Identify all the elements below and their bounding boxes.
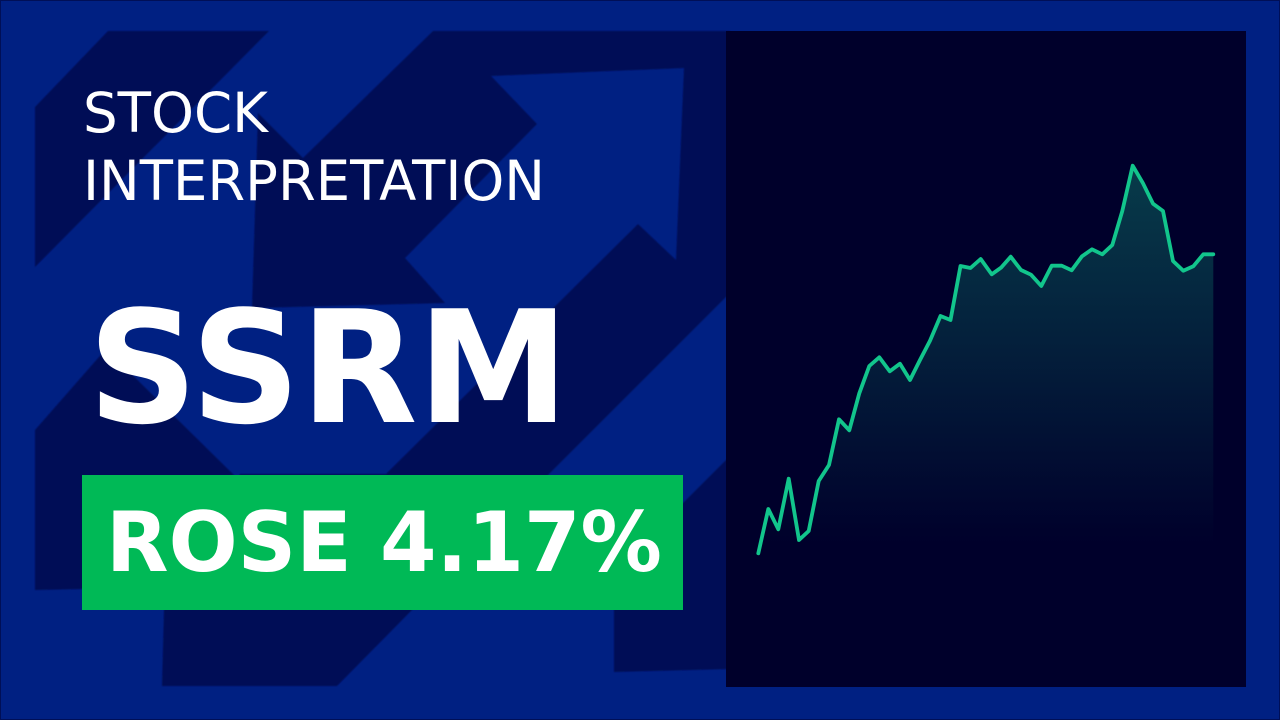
title line 1: STOCK [83, 81, 270, 145]
change badge [82, 475, 683, 610]
chart panel [726, 31, 1246, 687]
price line [758, 166, 1213, 553]
background arrow pattern [35, 31, 730, 686]
area under price line [758, 166, 1213, 553]
ticker: SSRM [88, 277, 569, 459]
badge text: ROSE 4.17% [106, 494, 662, 591]
title line 2: INTERPRETATION [83, 149, 545, 213]
